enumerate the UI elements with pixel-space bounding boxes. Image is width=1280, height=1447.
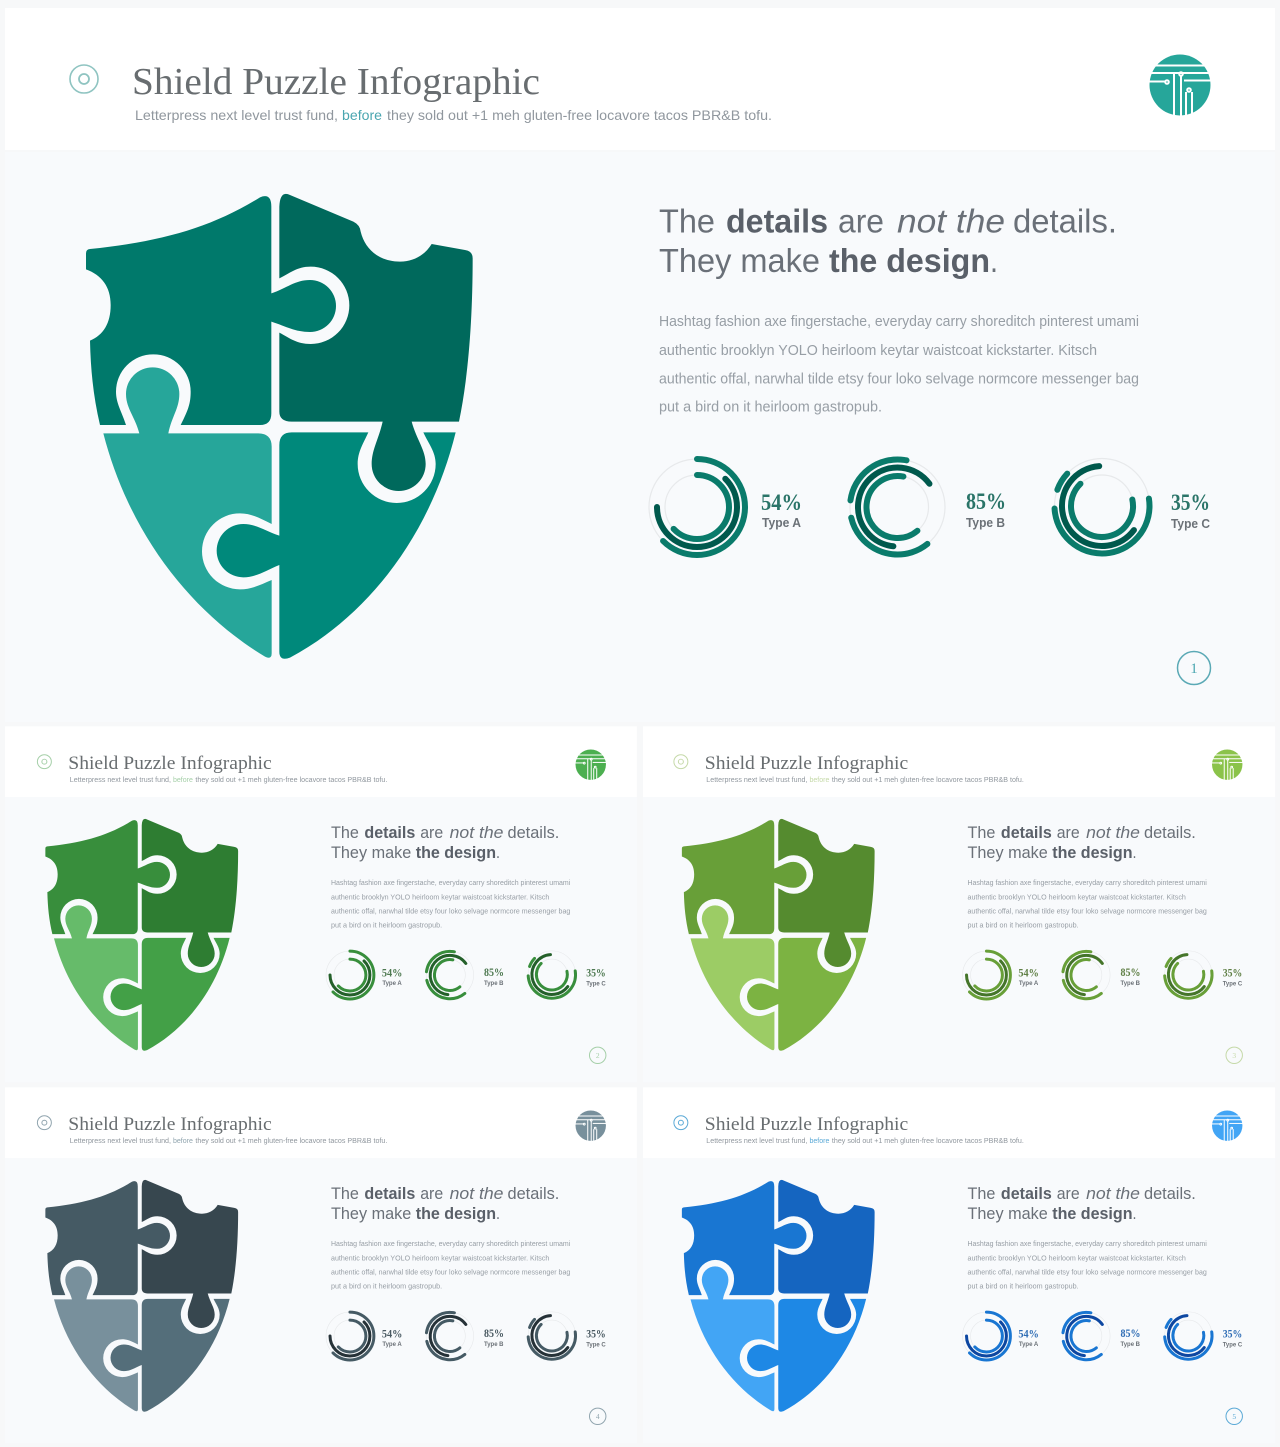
chart: Type B ring (831, 440, 1006, 574)
page number (589, 1408, 606, 1425)
headline: The (331, 824, 359, 842)
page number (1226, 1047, 1242, 1064)
headline: details (364, 1185, 415, 1203)
title: Shield Puzzle Infographic (705, 753, 908, 774)
headline: details (1001, 824, 1052, 842)
panel: main teal slide (5, 8, 1275, 722)
icon: logo (1146, 54, 1214, 116)
headline: details (726, 202, 828, 240)
chart: Type A ring (958, 947, 1039, 1003)
headline: . (1133, 844, 1137, 862)
headline (968, 824, 1196, 862)
chart: Type B ring (1053, 942, 1140, 1008)
body text (331, 1239, 571, 1290)
title: Shield Puzzle Infographic (132, 61, 540, 103)
headline: are (1057, 824, 1080, 842)
subtitle: Letterpress next level trust fund, (70, 1138, 171, 1145)
body text (968, 878, 1207, 929)
chart: Type A ring (322, 1308, 402, 1364)
chart: Type C ring: Type C (1223, 1342, 1243, 1349)
headline: details. (1144, 824, 1196, 842)
headline: the design (416, 844, 496, 862)
headline: The (968, 1185, 995, 1203)
chart: Type C ring (1041, 445, 1210, 567)
icon: target (37, 755, 51, 769)
body background (5, 797, 637, 1082)
headline (331, 824, 559, 862)
body text: Hashtag fashion axe fingerstache, everyday carry shoreditch pinterest umami (331, 878, 571, 887)
subtitle: they sold out +1 meh gluten-free locavore tacos PBR&B tofu. (832, 1138, 1024, 1145)
chart: Type A ring (322, 947, 402, 1003)
chart: Type B ring: Type B (966, 516, 1005, 530)
chart: Type B ring: Type B (1121, 980, 1140, 987)
headline: The (659, 202, 715, 240)
body text: put a bird on it heirloom gastropub. (968, 1281, 1079, 1290)
icon: logo (1210, 1110, 1244, 1141)
page number: 3 (1232, 1051, 1236, 1060)
page number: 1 (1190, 661, 1198, 677)
headline: the design (1052, 844, 1133, 862)
shield puzzle (45, 1180, 238, 1412)
chart: Type A ring: Type A (382, 1341, 402, 1348)
chart: Type C ring: 35% (1223, 1329, 1242, 1341)
chart: Type C ring (521, 944, 606, 1005)
headline: the design (416, 1205, 496, 1223)
body text (968, 1239, 1207, 1290)
chart: Type C ring: 35% (1171, 490, 1210, 515)
body text: authentic offal, narwhal tilde etsy four loko selvage normcore messenger bag (331, 906, 570, 915)
headline: details (1001, 1185, 1052, 1203)
chart: Type B ring: Type B (484, 1341, 504, 1348)
chart: Type A ring (958, 1308, 1039, 1364)
headline (968, 1185, 1196, 1223)
headline: . (990, 242, 998, 279)
subtitle: Letterpress next level trust fund, (706, 1138, 808, 1145)
chart: Type B ring: Type B (1121, 1341, 1140, 1348)
chart: Type B ring: 85% (484, 967, 504, 979)
chart: Type A ring: Type A (762, 516, 801, 530)
chart: Type C ring: Type C (586, 981, 606, 988)
body text: authentic brooklyn YOLO heirloom keytar waistcoat kickstarter. Kitsch (331, 892, 549, 901)
shield puzzle (682, 819, 875, 1051)
title: Shield Puzzle Infographic (68, 1114, 272, 1135)
body text: authentic offal, narwhal tilde etsy four loko selvage normcore messenger bag (659, 372, 1139, 388)
subtitle: before (809, 1138, 830, 1145)
headline: are (838, 202, 884, 240)
subtitle: they sold out +1 meh gluten-free locavore tacos PBR&B tofu. (387, 107, 772, 123)
headline: . (1133, 1205, 1137, 1223)
chart: Type A ring: Type A (382, 980, 402, 987)
header band (5, 1087, 637, 1158)
body text: authentic offal, narwhal tilde etsy four loko selvage normcore messenger bag (331, 1267, 570, 1276)
headline (331, 1185, 559, 1223)
subtitle: they sold out +1 meh gluten-free locavore tacos PBR&B tofu. (832, 777, 1024, 784)
body text: Hashtag fashion axe fingerstache, everyday carry shoreditch pinterest umami (968, 1239, 1207, 1248)
body text: Hashtag fashion axe fingerstache, everyday carry shoreditch pinterest umami (968, 878, 1207, 887)
chart: Type B ring (417, 942, 504, 1008)
panel: slate slide (5, 1087, 637, 1443)
chart: Type C ring: 35% (586, 1329, 606, 1341)
headline: the design (829, 242, 990, 279)
headline: not the (1086, 1185, 1140, 1203)
body text (659, 314, 1139, 416)
chart: Type B ring: 85% (1121, 967, 1140, 979)
headline: are (1057, 1185, 1080, 1203)
headline: . (496, 844, 500, 862)
chart: Type A ring: Type A (1019, 1341, 1039, 1348)
subtitle: before (173, 1138, 193, 1145)
header band (5, 8, 1275, 150)
shield puzzle (682, 1180, 875, 1412)
body background (643, 797, 1275, 1082)
icon: target (674, 755, 688, 769)
headline (659, 202, 1117, 279)
body background (5, 152, 1275, 722)
chart: Type B ring: 85% (1121, 1328, 1140, 1340)
header band (643, 726, 1275, 797)
headline: The (968, 824, 995, 842)
headline: details. (507, 1185, 559, 1203)
subtitle: Letterpress next level trust fund, (135, 107, 338, 123)
body text: authentic brooklyn YOLO heirloom keytar waistcoat kickstarter. Kitsch (659, 343, 1097, 359)
chart: Type C ring: Type C (1223, 981, 1243, 988)
chart: Type B ring: 85% (966, 489, 1006, 514)
panel: lime slide (643, 726, 1275, 1082)
headline: They make (968, 1205, 1048, 1223)
header band (5, 726, 637, 797)
headline: . (496, 1205, 500, 1223)
headline: details. (1013, 202, 1117, 240)
chart: Type C ring (521, 1305, 606, 1366)
chart: Type A ring: 54% (1018, 968, 1039, 980)
body text (331, 878, 571, 929)
subtitle: they sold out +1 meh gluten-free locavore tacos PBR&B tofu. (195, 777, 387, 784)
chart: Type C ring (1158, 944, 1243, 1005)
page number (1226, 1408, 1242, 1425)
headline: details. (507, 824, 559, 842)
body background (5, 1158, 637, 1443)
headline: are (420, 824, 443, 842)
body text: put a bird on it heirloom gastropub. (968, 920, 1079, 929)
shield puzzle (45, 819, 238, 1051)
header band (643, 1087, 1275, 1158)
chart: Type B ring (417, 1303, 504, 1369)
chart: Type A ring: 54% (382, 968, 402, 980)
body text: put a bird on it heirloom gastropub. (659, 400, 882, 416)
subtitle: they sold out +1 meh gluten-free locavore tacos PBR&B tofu. (195, 1138, 387, 1145)
headline: not the (450, 824, 503, 842)
icon: logo (574, 749, 608, 780)
headline: They make (659, 242, 820, 279)
body text: Hashtag fashion axe fingerstache, everyday carry shoreditch pinterest umami (331, 1239, 571, 1248)
chart: Type A ring: 54% (761, 490, 802, 515)
chart: Type C ring (1158, 1305, 1243, 1366)
chart: Type C ring: 35% (586, 968, 606, 980)
headline: They make (331, 1205, 411, 1223)
body text: Hashtag fashion axe fingerstache, everyday carry shoreditch pinterest umami (659, 314, 1139, 330)
headline: not the (450, 1185, 503, 1203)
headline: are (420, 1185, 443, 1203)
chart: Type C ring: Type C (1171, 517, 1210, 531)
chart: Type B ring: Type B (484, 980, 504, 987)
shield puzzle (86, 194, 473, 659)
subtitle: before (809, 777, 830, 784)
chart: Type A ring (640, 450, 802, 564)
body text: put a bird on it heirloom gastropub. (331, 920, 442, 929)
subtitle: Letterpress next level trust fund, (70, 777, 171, 784)
body text: authentic offal, narwhal tilde etsy four loko selvage normcore messenger bag (968, 1267, 1207, 1276)
chart: Type A ring: 54% (1018, 1329, 1039, 1341)
title: Shield Puzzle Infographic (68, 753, 272, 774)
icon: target (70, 65, 98, 93)
headline: details (364, 824, 415, 842)
icon: target (674, 1116, 688, 1130)
body text: authentic brooklyn YOLO heirloom keytar waistcoat kickstarter. Kitsch (331, 1253, 549, 1262)
body text: authentic brooklyn YOLO heirloom keytar waistcoat kickstarter. Kitsch (968, 892, 1186, 901)
subtitle: before (342, 107, 382, 123)
page number (1178, 652, 1210, 684)
chart: Type C ring: 35% (1223, 968, 1242, 980)
headline: They make (968, 844, 1048, 862)
headline: They make (331, 844, 411, 862)
subtitle: Letterpress next level trust fund, (706, 777, 808, 784)
headline: not the (897, 202, 1005, 240)
panel: blue slide (643, 1087, 1275, 1443)
headline: the design (1052, 1205, 1133, 1223)
body background (643, 1158, 1275, 1443)
page number: 5 (1232, 1412, 1236, 1421)
panel: green slide (5, 726, 637, 1082)
headline: The (331, 1185, 359, 1203)
page number (589, 1047, 606, 1064)
chart: Type B ring: 85% (484, 1328, 504, 1340)
chart: Type C ring: Type C (586, 1342, 606, 1349)
icon: logo (574, 1110, 608, 1141)
page number: 2 (596, 1051, 600, 1060)
chart: Type A ring: Type A (1019, 980, 1039, 987)
icon: logo (1210, 749, 1244, 780)
subtitle: before (173, 777, 193, 784)
body text: authentic brooklyn YOLO heirloom keytar waistcoat kickstarter. Kitsch (968, 1253, 1186, 1262)
headline: details. (1144, 1185, 1196, 1203)
title: Shield Puzzle Infographic (705, 1114, 908, 1135)
chart: Type A ring: 54% (382, 1329, 402, 1341)
page number: 4 (596, 1412, 600, 1421)
body text: put a bird on it heirloom gastropub. (331, 1281, 442, 1290)
body text: authentic offal, narwhal tilde etsy four loko selvage normcore messenger bag (968, 906, 1207, 915)
headline: not the (1086, 824, 1140, 842)
chart: Type B ring (1053, 1303, 1140, 1369)
icon: target (37, 1116, 51, 1130)
